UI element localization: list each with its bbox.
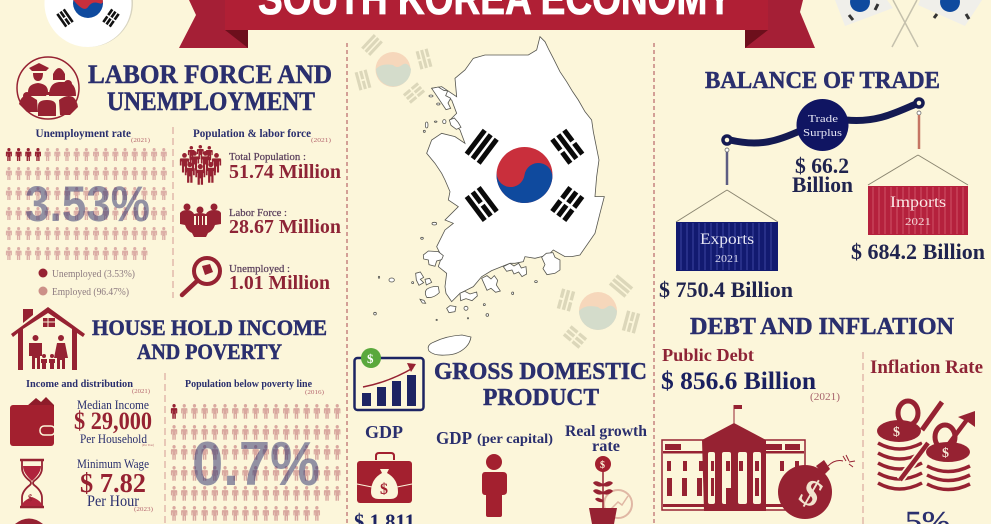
icon: capitol building <box>662 405 805 511</box>
icon: coins and percent: $ <box>942 446 949 461</box>
subheading: income and distribution: Income and distribution <box>26 378 133 390</box>
title banner <box>179 0 815 48</box>
statistic: 3.53%: 3.53% <box>25 176 150 232</box>
panel: gross domestic product <box>354 348 647 524</box>
text: minimum wage: $ 7.82 <box>80 468 146 498</box>
subheading: income and distribution <box>26 378 150 395</box>
legend <box>38 268 135 298</box>
heading: HOUSE HOLD INCOME <box>92 315 327 340</box>
text: median income: (Per Year) <box>142 443 154 447</box>
icon: coins and percent <box>877 401 975 490</box>
text: total population <box>229 151 341 183</box>
label: real growth rate: rate <box>592 438 620 455</box>
imports container: Imports <box>890 194 946 211</box>
trigrams <box>465 129 584 222</box>
text: median income: Per Household <box>80 431 147 446</box>
icon: magnifying glass <box>182 258 220 295</box>
exports container: 2021 <box>715 253 739 265</box>
legend: Unemployed (3.53%) <box>52 269 135 280</box>
label: GDP per capita: (per capital) <box>477 432 553 447</box>
imports container: 2021 <box>905 216 931 228</box>
heading: BALANCE OF TRADE <box>705 68 940 94</box>
panel: household income and poverty <box>10 307 340 524</box>
icon: house with family <box>11 307 85 370</box>
panel: balance of trade <box>659 68 985 302</box>
statistic: 0.7%: 0.7% <box>192 430 320 499</box>
subheading: population and labor force: (2021) <box>311 137 331 144</box>
subheading: poverty line: (2016) <box>305 389 324 396</box>
value: public debt: (2021) <box>810 392 840 403</box>
value: exports: $ 750.4 Billion <box>659 277 793 302</box>
value: public debt <box>661 368 840 403</box>
heading: DEBT AND INFLATION <box>690 314 955 340</box>
map outline <box>374 37 604 321</box>
label: GDP per capita <box>436 428 553 448</box>
icon: workers <box>17 57 79 119</box>
dashed column dividers <box>165 43 863 524</box>
subheading: poverty line <box>185 378 324 396</box>
icon: briefcase: $ <box>380 481 388 498</box>
text: median income <box>74 397 154 447</box>
icon: wallet <box>10 397 55 446</box>
exports container: Exports <box>700 231 754 248</box>
label: real growth rate: Real growth <box>565 423 647 440</box>
heading: AND POVERTY <box>137 339 282 364</box>
icon: coins and percent: $ <box>893 425 900 440</box>
value: trade surplus <box>792 153 853 197</box>
text: unemployed: 1.01 Million <box>229 272 330 294</box>
value: trade surplus: Billion <box>792 172 853 197</box>
subheading: poverty line: Population below poverty line <box>185 378 312 390</box>
exports container <box>676 148 778 271</box>
icon: money plant <box>589 456 632 524</box>
text: minimum wage: (2023) <box>134 506 153 513</box>
icon: growth chart: $ <box>367 351 374 366</box>
subheading: unemployment rate: Unemployment rate <box>36 128 131 140</box>
icon: hourglass <box>20 460 44 507</box>
value: public debt: $ 856.6 Billion <box>661 368 816 395</box>
text: total population: 51.74 Million <box>229 161 341 183</box>
value: trade surplus: $ 66.2 <box>795 153 849 178</box>
text: median income: Median Income <box>77 397 149 412</box>
label: GDP per capita: GDP <box>436 428 472 448</box>
subheading: population and labor force: Population & labor force <box>193 128 311 140</box>
icon: money plant: $ <box>600 460 605 471</box>
subheading: income and distribution: (2021) <box>132 388 150 395</box>
island: Jeju <box>428 335 471 355</box>
icon: dollar bomb: $ <box>792 471 830 517</box>
trade surplus circle: Trade <box>808 113 838 125</box>
taegeuk symbol <box>493 147 554 207</box>
text: total population: Total Population : <box>229 151 306 163</box>
text: minimum wage: Minimum Wage <box>77 456 149 471</box>
heading <box>92 315 327 364</box>
icon: briefcase <box>357 453 412 503</box>
map of South Korea <box>374 37 604 355</box>
text: labor force: Labor Force : <box>229 207 287 219</box>
panel: debt and inflation <box>661 314 983 524</box>
trade surplus circle: Surplus <box>803 127 842 139</box>
icon: person <box>482 454 507 517</box>
subheading: unemployment rate: (2021) <box>131 137 150 144</box>
label: public debt: Public Debt <box>662 345 754 365</box>
heading <box>88 60 332 116</box>
heading: GROSS DOMESTIC <box>434 359 647 385</box>
faded flag top left <box>355 34 432 104</box>
text: unemployed: Unemployed : <box>229 263 290 275</box>
heading <box>434 359 647 411</box>
label: GDP: GDP <box>365 422 403 442</box>
text: labor force: 28.67 Million <box>229 216 341 238</box>
pictogram: poverty <box>171 404 340 521</box>
panel: labor force and unemployment <box>6 57 341 298</box>
icon: dollar bomb <box>778 455 855 519</box>
round flag badge <box>44 0 133 47</box>
text: median income: $ 29,000 <box>74 408 152 435</box>
heading: PRODUCT <box>483 385 599 411</box>
faded flag bottom right <box>557 274 640 349</box>
legend: Employed (96.47%) <box>52 287 129 298</box>
value: imports: $ 684.2 Billion <box>851 239 985 264</box>
icon: growth chart <box>354 348 424 410</box>
balance beam <box>723 99 923 144</box>
heading: LABOR FORCE AND <box>88 60 332 89</box>
subheading: unemployment rate <box>36 128 150 144</box>
pictogram: unemployment <box>6 148 167 260</box>
label: inflation rate: Inflation Rate <box>870 357 983 378</box>
label: real growth rate <box>565 423 647 455</box>
trade surplus circle <box>796 99 848 151</box>
icon: bottom coin <box>15 518 43 524</box>
icon: hourglass: $ <box>28 493 33 503</box>
subheading: population and labor force <box>193 128 331 144</box>
text: minimum wage: Per Hour <box>87 493 140 510</box>
icon: labor force gear <box>180 204 221 237</box>
heading: UNEMPLOYMENT <box>107 87 315 116</box>
crossed flags <box>835 0 982 47</box>
icon: crowd <box>180 145 221 185</box>
text: minimum wage <box>77 456 153 513</box>
imports container <box>868 111 968 235</box>
